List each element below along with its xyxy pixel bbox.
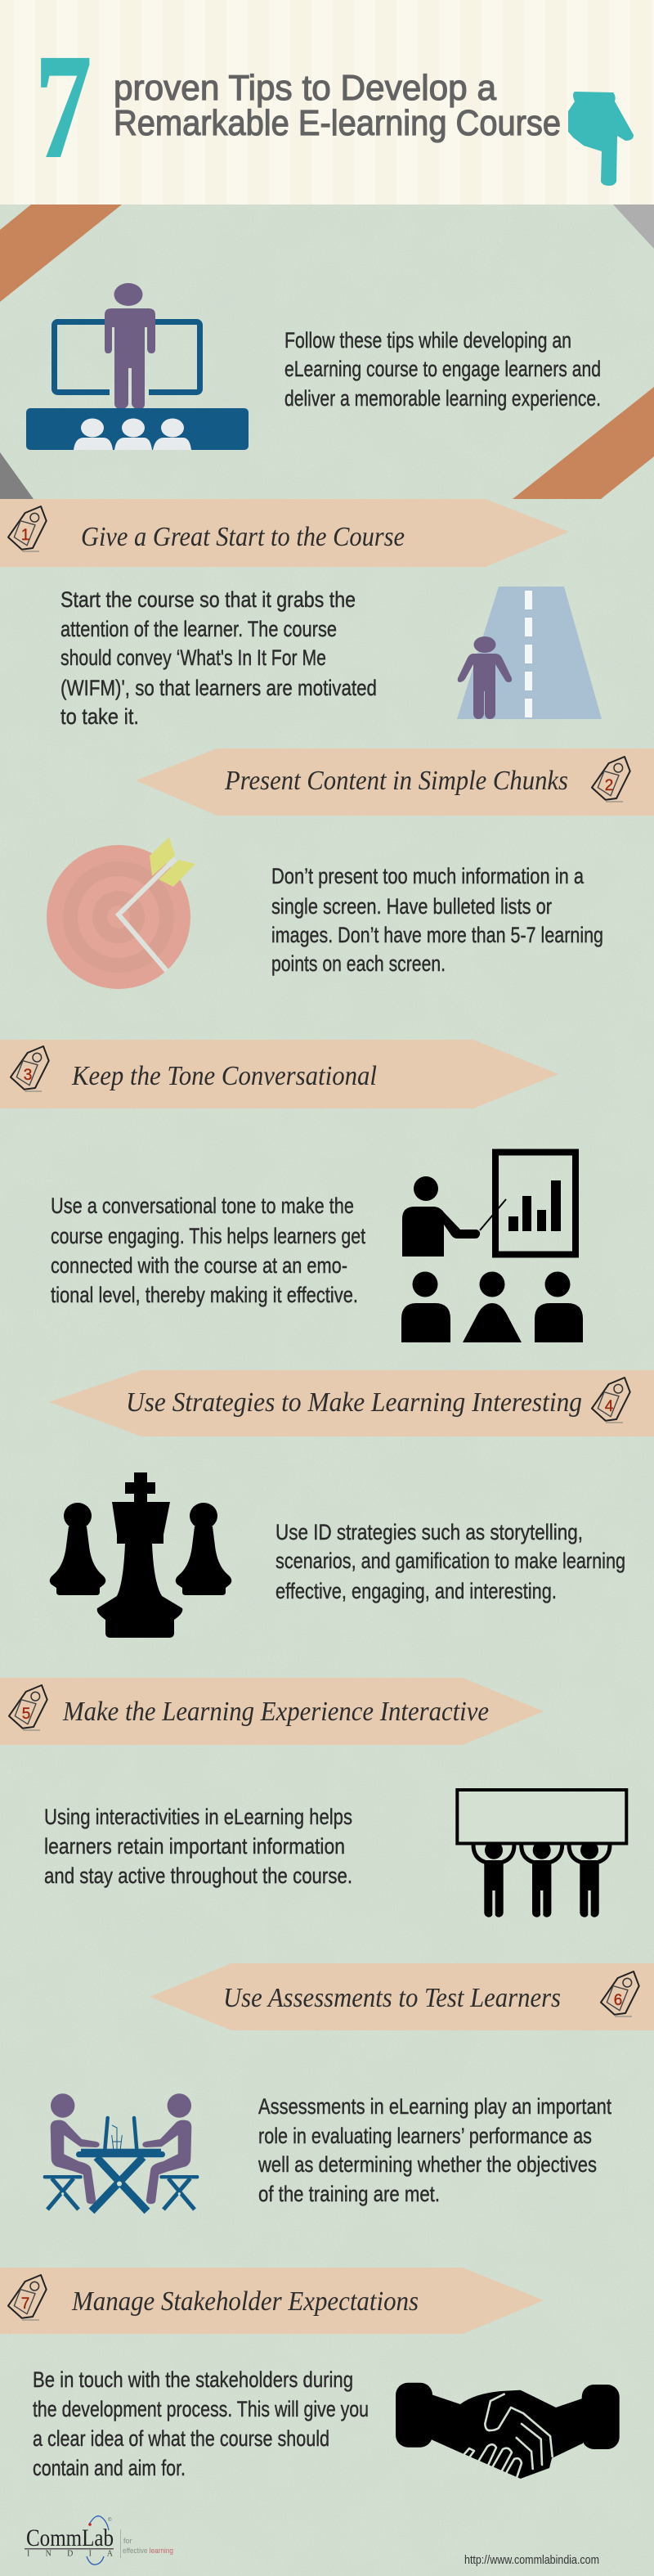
icon: tag 7: 7 (21, 2295, 29, 2313)
text: tip 3: tional level, thereby making it effective. (51, 1283, 358, 1307)
panel: tip 6 ribbon (150, 1963, 654, 2030)
icon: tag 7 (8, 2275, 47, 2320)
text: tip 3: Use a conversational tone to make the (51, 1194, 354, 1218)
text: tip 1: (WIFM)', so that learners are motivated (60, 676, 377, 700)
icon: tag 5: 5 (22, 1706, 30, 1723)
icon: chess pieces (50, 1472, 231, 1638)
title (114, 68, 561, 143)
icon: pointing hand (568, 92, 634, 186)
heading 4: Use Strategies to Make Learning Interesting (126, 1387, 582, 1418)
icon: tag 6 (601, 1971, 639, 2016)
panel: tip 3 ribbon (0, 1040, 558, 1108)
heading 2: Present Content in Simple Chunks (224, 766, 568, 796)
big number seven: 7 (35, 25, 92, 189)
icon: tag 1 (8, 506, 47, 551)
website url: http://www.commlabindia.com (464, 2553, 599, 2567)
text: tip 4 (275, 1520, 625, 1603)
heading 3: Keep the Tone Conversational (71, 1061, 377, 1091)
text: tip 1: should convey ‘What's In It For Me (60, 645, 326, 670)
text: tip 4: Use ID strategies such as storytelling, (275, 1520, 583, 1544)
title: Remarkable E-learning Course (114, 103, 561, 143)
text: tip 2: Don’t present too much information in a (271, 864, 585, 888)
icon: tag 3: 3 (24, 1067, 32, 1084)
icon: tag 4 (592, 1378, 630, 1423)
logo: CommLab India: CommLab (26, 2524, 114, 2551)
heading 6: Use Assessments to Test Learners (223, 1983, 561, 2013)
icon: tag 4: 4 (605, 1398, 614, 1415)
icon: three people lifting a board (457, 1790, 626, 1917)
text: tip 3 (51, 1194, 365, 1307)
logo: CommLab India (25, 2516, 173, 2565)
text: tip 7: contain and aim for. (33, 2456, 186, 2480)
icon: road and person (457, 587, 602, 719)
intro text: Follow these tips while developing an (284, 328, 571, 353)
icon: tag 1: 1 (21, 527, 29, 544)
text: tip 5: Using interactivities in eLearning helps (44, 1805, 352, 1829)
text: tip 5: learners retain important information (44, 1834, 345, 1859)
text: tip 3: connected with the course at an emo- (51, 1253, 347, 1278)
logo: CommLab India: for (123, 2537, 132, 2545)
icon: presenter on screen (26, 283, 249, 450)
text: tip 2: points on each screen. (271, 951, 446, 976)
text: tip 6 (258, 2094, 611, 2206)
panel: tip 2 ribbon (136, 749, 654, 816)
heading 7: Manage Stakeholder Expectations (71, 2286, 419, 2317)
title: proven Tips to Develop a (114, 68, 497, 108)
text: tip 5: and stay active throughout the course. (44, 1863, 352, 1888)
text: tip 3: course engaging. This helps learners get (51, 1224, 365, 1248)
panel: tip 5 ribbon (0, 1678, 544, 1745)
panel: tip 4 ribbon (49, 1370, 654, 1436)
text: tip 2 (271, 864, 603, 976)
intro text (284, 328, 601, 411)
icon: presenter with chart and audience (401, 1152, 583, 1342)
text: tip 6: of the training are met. (258, 2182, 440, 2206)
heading 5: Make the Learning Experience Interactive (62, 1697, 489, 1727)
text: tip 7 (33, 2367, 369, 2480)
icon: tag 3 (11, 1046, 49, 1091)
logo: CommLab India: © (108, 2517, 112, 2523)
panel: tip 1 ribbon (0, 499, 569, 567)
heading 1: Give a Great Start to the Course (81, 522, 405, 552)
icon: tag 2: 2 (605, 777, 613, 794)
text: tip 1: Start the course so that it grabs the (60, 587, 356, 612)
panel: tip 7 ribbon (0, 2268, 544, 2334)
logo: CommLab India: I N D I A (27, 2549, 114, 2559)
icon: target and arrow (47, 837, 195, 989)
decorative corner bands (0, 205, 654, 499)
text: tip 2: single screen. Have bulleted lists or (271, 894, 552, 919)
panel: header band (0, 0, 654, 205)
icon: two people at a table (43, 2093, 199, 2211)
text: tip 1: attention of the learner. The course (60, 617, 337, 641)
icon: tag 6: 6 (614, 1992, 622, 2009)
icon: handshake (396, 2383, 620, 2479)
text: tip 7: the development process. This will give you (33, 2397, 369, 2421)
text: tip 1 (60, 587, 377, 729)
icon: tag 2 (592, 757, 630, 802)
text: tip 5 (44, 1805, 352, 1888)
text: tip 7: Be in touch with the stakeholders during (33, 2367, 353, 2392)
icon: tag 5 (9, 1685, 47, 1730)
logo: CommLab India: effective learning (123, 2547, 173, 2556)
text: tip 1: to take it. (60, 704, 139, 729)
text: tip 4: effective, engaging, and interesting. (275, 1579, 557, 1603)
text: tip 7: a clear idea of what the course should (33, 2426, 329, 2451)
